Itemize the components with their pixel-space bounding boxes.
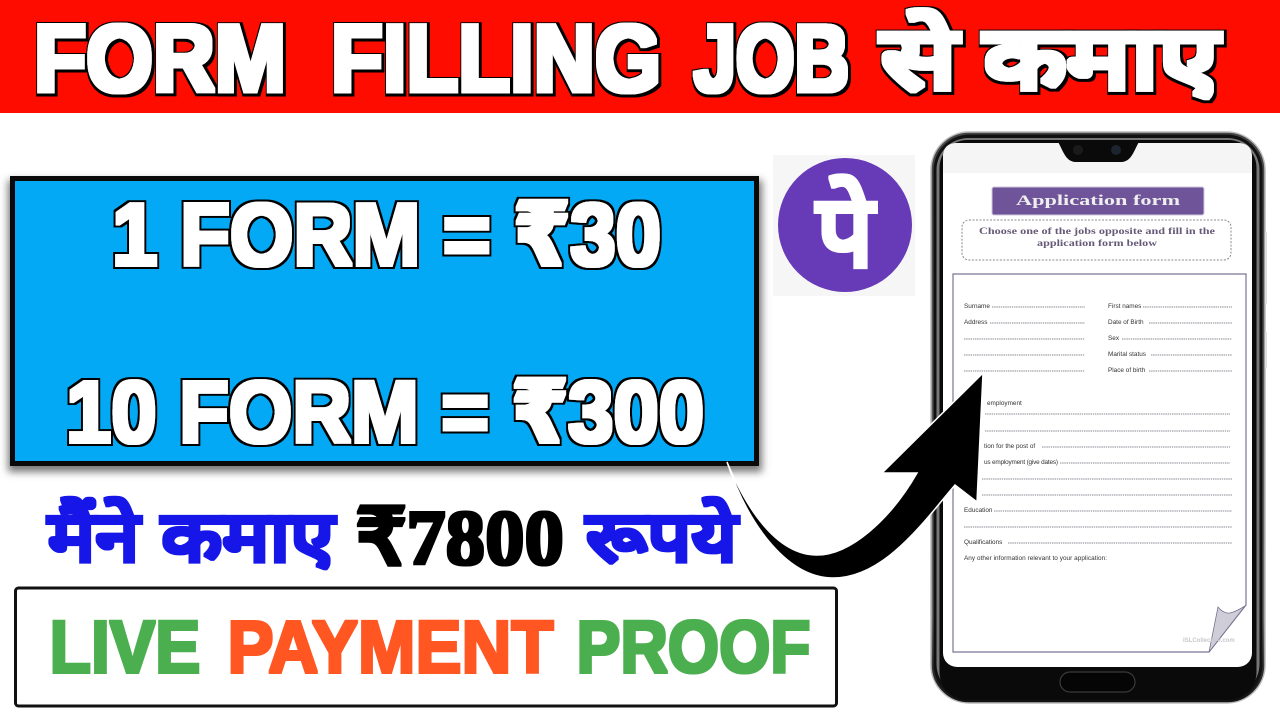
form fields: us employment (give dates): [984, 459, 1058, 466]
form fields: First names: [1108, 303, 1141, 310]
title text: FORM: [34, 6, 286, 112]
icon: PhonePe logo: [773, 155, 915, 296]
form instructions: [962, 220, 1231, 260]
arrow: [727, 373, 983, 578]
panel: live payment proof: PROOF: [576, 606, 810, 688]
form instructions: application form below: [1037, 239, 1157, 249]
title text: से: [878, 9, 961, 107]
title text: कमाए: [982, 11, 1222, 107]
icon: PhonePe logo: पे: [815, 174, 877, 288]
phone mockup: [931, 132, 1267, 703]
rate: ten forms: 10 FORM = ₹300: [66, 364, 704, 461]
panel: live payment proof: LIVE: [50, 606, 200, 688]
form fields: Surname: [964, 303, 990, 310]
form fields: Date of Birth: [1108, 319, 1144, 326]
form fields: Address: [964, 319, 987, 326]
form fields: Qualifications: [964, 539, 1002, 546]
form fields: tion for the post of: [984, 443, 1035, 450]
form fields: ISLCollective.com: [1183, 638, 1235, 644]
form fields: Marital status: [1108, 351, 1146, 358]
page curl: [1209, 606, 1245, 652]
form fields: [953, 274, 1246, 652]
form fields: employment: [987, 400, 1022, 407]
title banner: [0, 0, 1280, 113]
form instructions: Choose one of the jobs opposite and fill in the: [979, 227, 1215, 237]
form fields: Any other information relevant to your application:: [964, 555, 1107, 562]
home button: [1060, 672, 1135, 692]
earnings line: मैंने कमाए: [46, 497, 337, 576]
rate: one form: 1 FORM = ₹30: [112, 185, 661, 284]
screen: [943, 143, 1252, 667]
earnings line: रूपये: [584, 497, 740, 576]
phone body: [931, 132, 1265, 703]
panel: live payment proof: PAYMENT: [228, 606, 554, 688]
form header: Application form: [1016, 193, 1180, 209]
title text: JOB: [694, 6, 849, 112]
form fields: Education: [964, 507, 993, 514]
notch: [1058, 142, 1139, 162]
panel: rates: [8, 178, 762, 472]
title text: FILLING: [331, 6, 661, 112]
form fields: Sex: [1108, 335, 1120, 342]
form header: [992, 187, 1204, 215]
form fields: Place of birth: [1108, 367, 1146, 374]
title text: [34, 6, 1222, 112]
panel: live payment proof: [16, 588, 836, 706]
earnings line: ₹7800: [356, 494, 564, 581]
earnings line: [46, 494, 740, 581]
